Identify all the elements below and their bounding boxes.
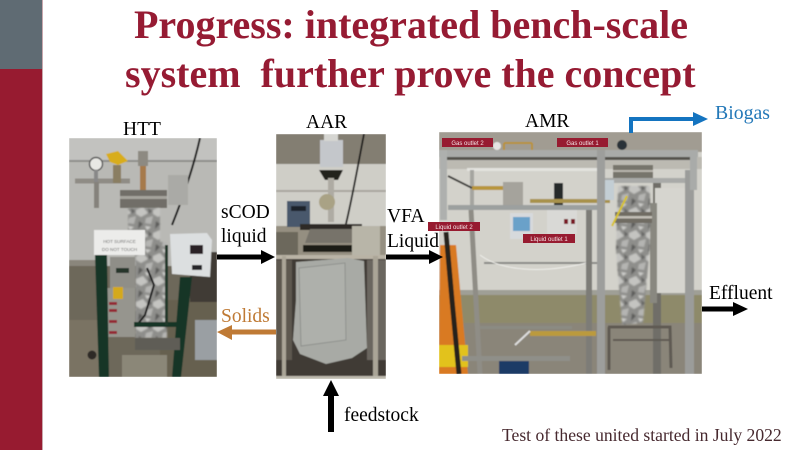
arrow and label: feedstock: feedstock <box>344 405 419 426</box>
photo: AMR reactor <box>439 132 702 374</box>
safety sign: HOT SURFACE <box>103 239 136 244</box>
arrow and label: VFA Liquid <box>386 206 443 264</box>
arrow and label: VFA Liquid: VFA <box>387 206 425 227</box>
label: liquid outlet 2: Liquid outlet 2 <box>435 225 473 231</box>
orange drum <box>439 232 468 374</box>
foil column <box>613 165 653 325</box>
arrow and label: Solids <box>217 306 276 340</box>
safety sign: DO NOT TOUCH <box>102 247 137 252</box>
transmitter <box>510 213 533 239</box>
safety sign <box>94 230 145 255</box>
controller <box>287 201 310 227</box>
arrow and label: sCOD liquid: liquid <box>221 226 267 247</box>
arrow and label: sCOD liquid <box>217 202 275 264</box>
arrow and label: Solids: Solids <box>221 306 270 327</box>
sidebar <box>0 0 43 450</box>
outlet labels in photo: Gas outlet 1 <box>566 141 599 147</box>
footnote: Test of these united started in July 2022 <box>502 425 782 445</box>
upper shelf fittings <box>472 182 610 205</box>
label: liquid outlet 2 <box>428 222 480 231</box>
arrow and label: sCOD liquid: sCOD <box>221 202 270 223</box>
insulation jacket <box>293 258 367 364</box>
photo: AAR reactor <box>276 134 386 379</box>
label: HTT: HTT <box>123 119 161 140</box>
arrow and label: VFA Liquid: Liquid <box>387 231 439 252</box>
label: AMR: AMR <box>525 111 569 132</box>
outlet labels in photo: Liquid outlet 1 <box>530 237 568 243</box>
arrow and label: Biogas <box>631 102 770 133</box>
arrow and label: feedstock <box>323 380 419 432</box>
title: system further prove the concept <box>125 51 696 96</box>
title <box>125 2 696 96</box>
outlet labels in photo <box>442 138 608 243</box>
arrow and label: Effluent: Effluent <box>709 283 773 304</box>
arrow and label: Effluent <box>702 283 773 316</box>
photo: HTT reactor <box>69 138 217 377</box>
outlet labels in photo: Gas outlet 2 <box>451 141 484 147</box>
arrow and label: Biogas: Biogas <box>715 102 770 124</box>
title: Progress: integrated bench-scale <box>134 2 688 47</box>
label: AAR: AAR <box>306 112 347 133</box>
control box <box>170 233 212 277</box>
